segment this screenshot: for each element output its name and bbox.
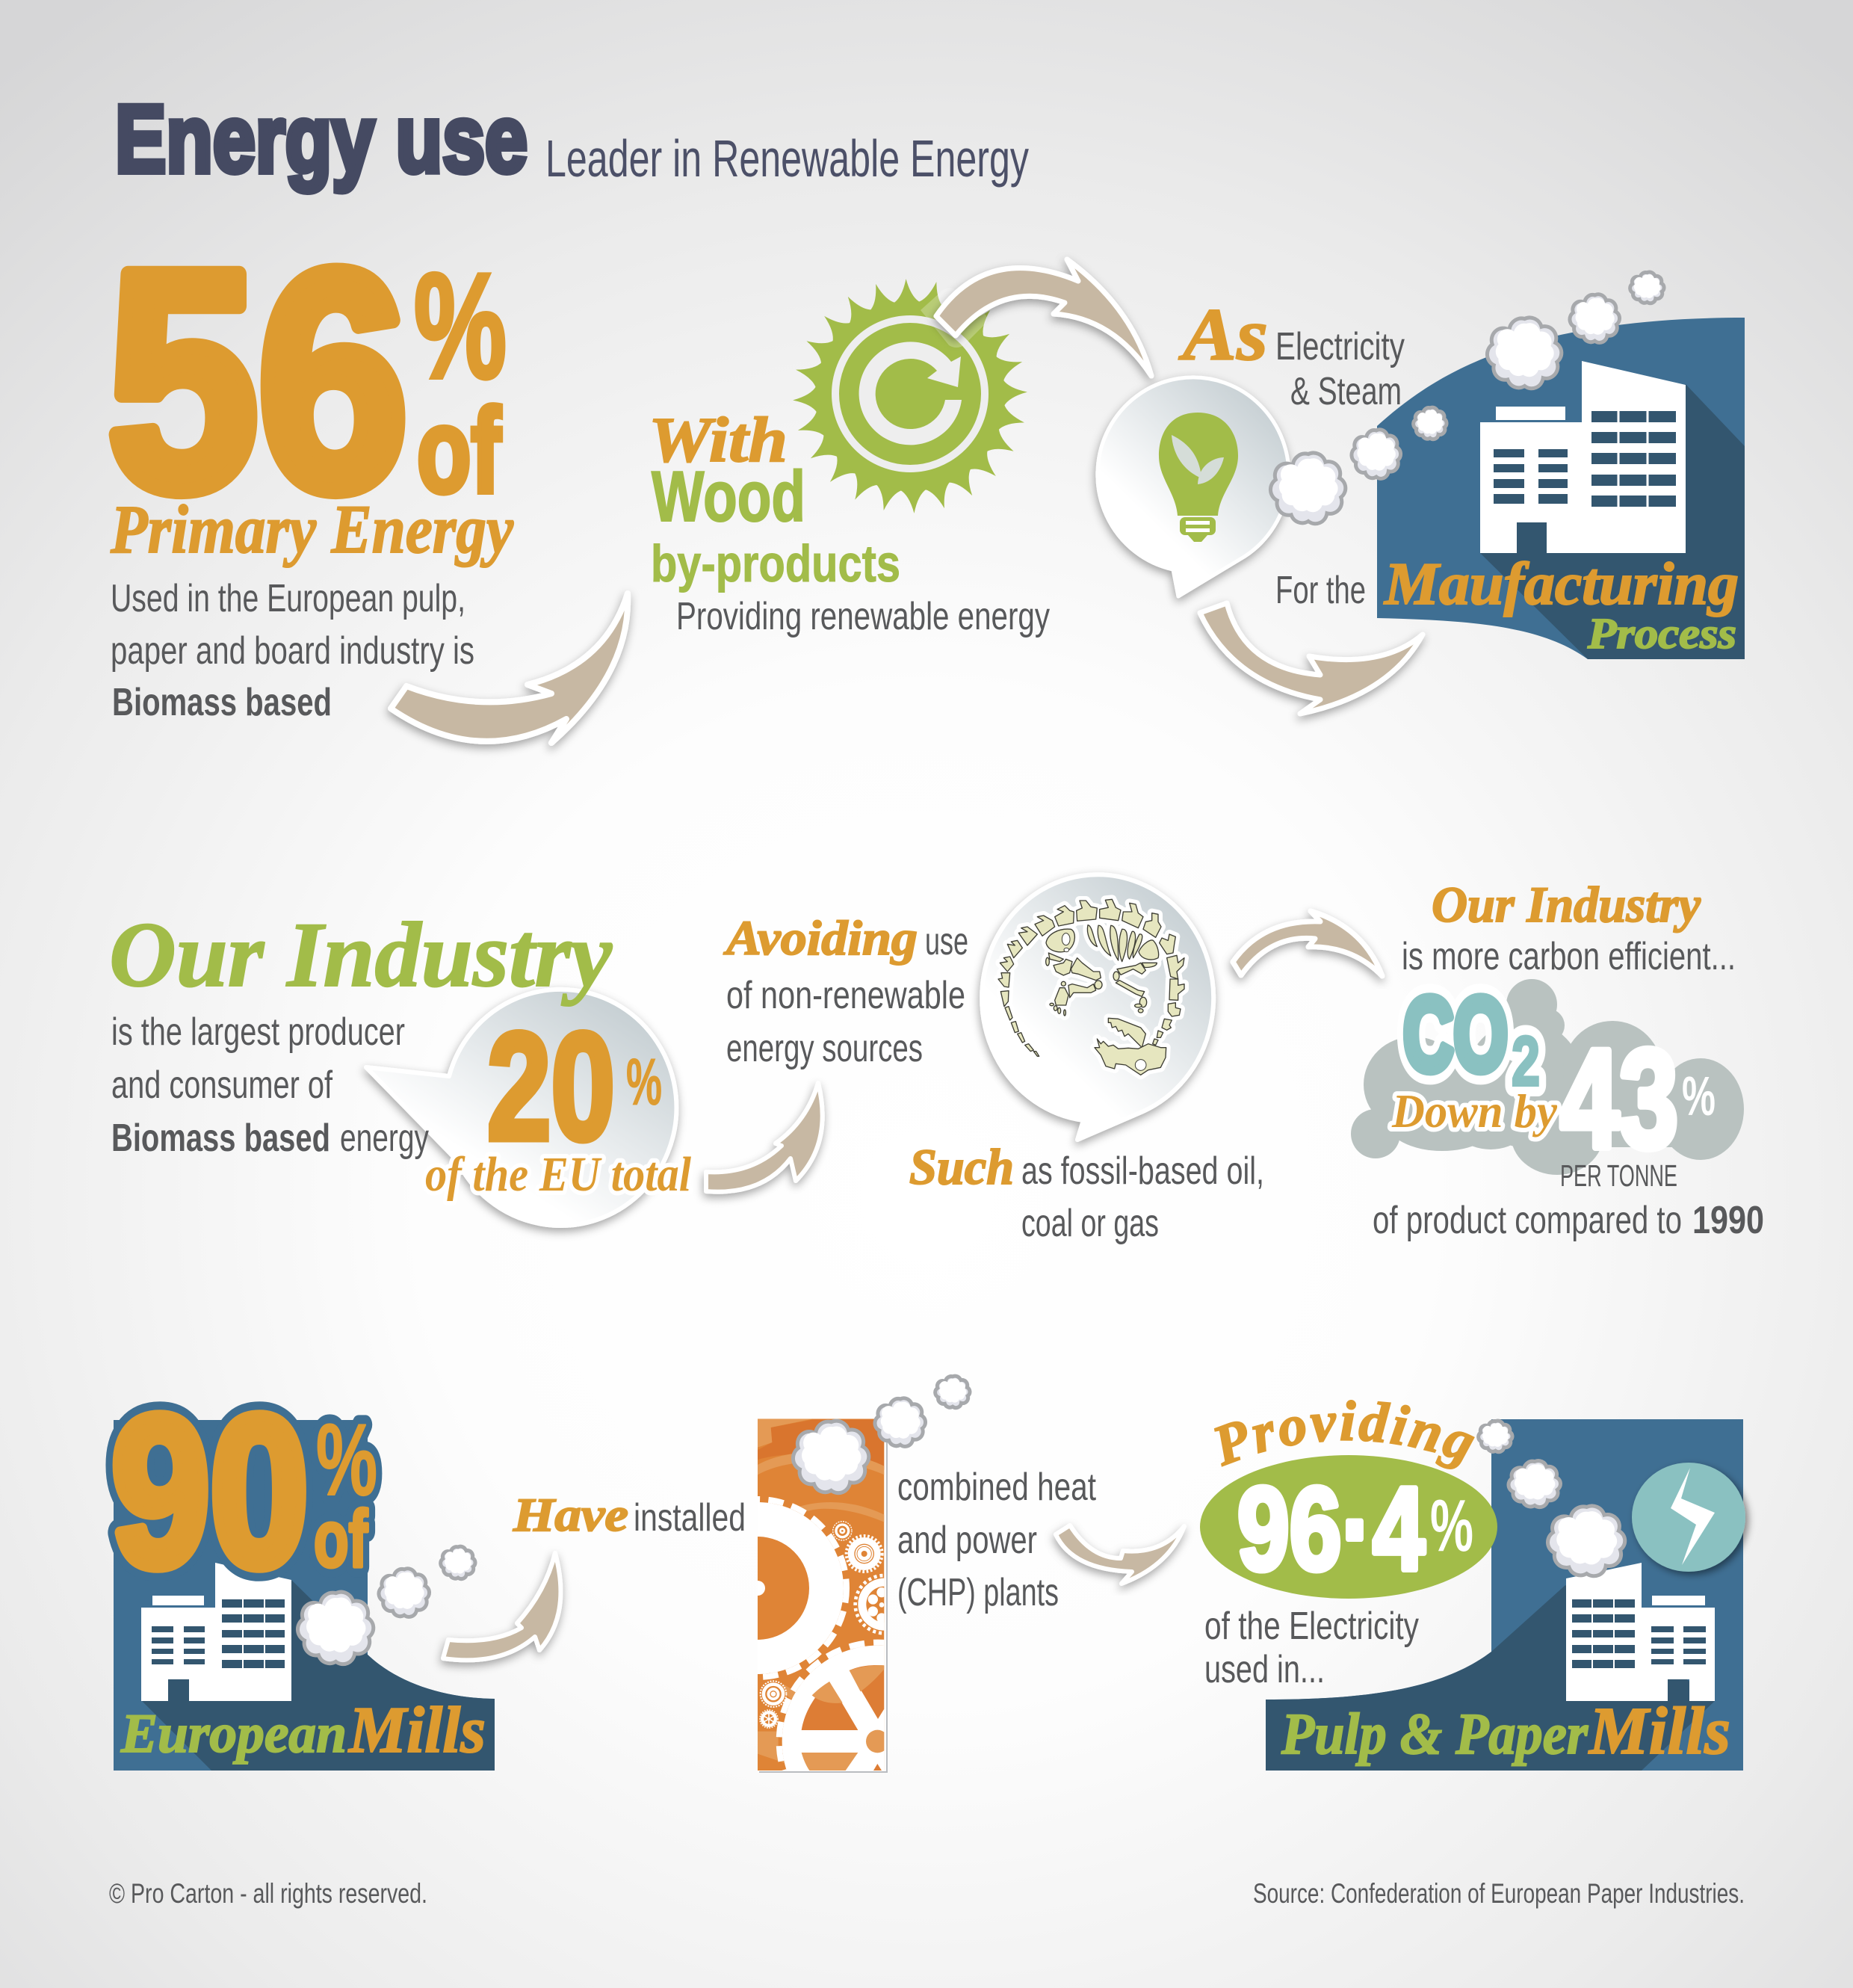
- text: such as fossil-based: [909, 1138, 1264, 1245]
- stat: 56% of primary energy: 56: [108, 207, 408, 555]
- script: pulp and paper mills: Pulp & Paper: [1281, 1701, 1588, 1766]
- script: pulp and paper mills: Mills: [1588, 1694, 1730, 1768]
- script: of the EU total: of the EU total: [425, 1147, 692, 1202]
- text: with wood by-products: by-products: [651, 534, 900, 593]
- text: combined heat and power: [897, 1466, 1096, 1614]
- arrow: biomass to wood: [391, 593, 628, 743]
- panel: European mills: [111, 1371, 495, 1771]
- text: with wood by-products: Wood: [652, 457, 805, 537]
- text: carbon efficient: is more carbon efficient...: [1402, 935, 1736, 978]
- footer: copyright: © Pro Carton - all rights reserved.: [109, 1878, 427, 1909]
- text: carbon efficient: Our Industry: [1432, 876, 1701, 933]
- clouds: CHP smoke: [793, 1376, 970, 1493]
- text: combined heat and power: and power: [897, 1519, 1037, 1562]
- text: largest producer: and consumer of: [111, 1064, 332, 1107]
- text: carbon efficient: [1402, 876, 1736, 978]
- stat: 56% of primary energy: of: [417, 383, 501, 517]
- text: avoiding non-renewable: [723, 911, 968, 1070]
- icon: factory building: [1566, 1563, 1715, 1701]
- arrow: to avoiding: [706, 1083, 823, 1192]
- speech bubble: 20 percent: [366, 990, 676, 1226]
- text: avoiding non-renewable: use: [925, 920, 968, 963]
- text: avoiding non-renewable: energy sources: [726, 1027, 923, 1070]
- text: have installed: Have: [513, 1488, 628, 1541]
- stat: providing 96.4%: 96·4: [1237, 1463, 1425, 1595]
- text: largest producer: energy: [340, 1117, 429, 1160]
- arrow: sun to bulb: [936, 259, 1151, 376]
- arrow: to providing: [1056, 1525, 1184, 1584]
- stat: CO2 down by 43%: CO: [1403, 975, 1508, 1093]
- text: biomass description: [111, 577, 474, 724]
- script: European Mills: Mills: [347, 1694, 486, 1767]
- stat: CO2 down by 43%: [1391, 975, 1716, 1177]
- script: Maufacturing Process: Process: [1587, 609, 1736, 658]
- stat: 56% of primary energy: %: [414, 243, 507, 410]
- stat: providing 96.4%: %: [1430, 1484, 1473, 1566]
- script: pulp and paper mills: [1281, 1694, 1730, 1768]
- text: per tonne: PER TONNE: [1560, 1158, 1677, 1193]
- stat: providing 96.4%: [1200, 1400, 1497, 1599]
- text: per tonne: 1990: [1692, 1199, 1764, 1242]
- stat: CO2 down by 43%: %: [1682, 1065, 1716, 1127]
- panel: manufacturing factory: [1377, 318, 1745, 659]
- text: as electricity and steam: Electricity: [1275, 325, 1405, 368]
- stat: 90% of: %: [316, 1403, 377, 1516]
- clouds: factory smoke: [1270, 272, 1664, 524]
- arrow: to carbon efficient: [1233, 911, 1382, 976]
- icon: dinosaur skeleton: [998, 899, 1184, 1075]
- text: combined heat and power: (CHP) plants: [897, 1571, 1059, 1614]
- text: largest producer: is the largest producer: [111, 1010, 405, 1054]
- panel: CHP gears: [758, 1419, 888, 1773]
- text: largest producer: [111, 1010, 429, 1160]
- text: biomass description: Biomass based: [112, 681, 332, 724]
- stat: CO2 down by 43%: 2: [1512, 1022, 1540, 1100]
- text: as electricity and steam: As: [1178, 293, 1268, 376]
- text: such as fossil-based: Such: [909, 1138, 1014, 1195]
- stat: 90% of: 90: [111, 1371, 309, 1611]
- icon: recycling sun: [792, 278, 1028, 514]
- text: as electricity and steam: For the: [1275, 569, 1366, 612]
- text: combined heat and power: combined heat: [897, 1466, 1096, 1509]
- icon: green bulb with leaves: [1159, 413, 1238, 542]
- title: [115, 86, 1029, 193]
- script: Primary Energy: Primary Energy: [110, 491, 514, 567]
- stat: 90% of: of: [314, 1493, 368, 1584]
- text: biomass description: Used in the European pulp,: [111, 577, 465, 620]
- text: avoiding non-renewable: of non-renewable: [726, 974, 965, 1017]
- speech bubble: fossil: [982, 874, 1213, 1140]
- text: with wood by-products: [649, 404, 1050, 638]
- stat: 90% of: of: [314, 1493, 368, 1584]
- clouds: pulp mill smoke: [1479, 1421, 1625, 1576]
- icon: factory building: [141, 1563, 291, 1701]
- text: as electricity and steam: [1178, 293, 1405, 612]
- text: per tonne: [1373, 1158, 1764, 1242]
- icon: lightning circle: [1632, 1463, 1745, 1572]
- text: with wood by-products: Providing renewable energy: [676, 595, 1050, 638]
- clouds: mill smoke: [297, 1546, 475, 1664]
- text: with wood by-products: With: [649, 404, 788, 475]
- title: Energy use: [115, 86, 528, 193]
- arrow: bulb to manufacturing: [1200, 603, 1423, 714]
- stat: 90% of: 90: [111, 1371, 309, 1611]
- subtitle: Leader in Renewable Energy: [545, 129, 1029, 188]
- script: Maufacturing Process: Maufacturing: [1383, 552, 1739, 617]
- text: of the electricity: used in...: [1204, 1648, 1325, 1691]
- text: have installed: installed: [634, 1496, 746, 1540]
- text: as electricity and steam: & Steam: [1290, 370, 1402, 413]
- stat: CO2 down by 43%: CO: [1403, 975, 1508, 1093]
- text: avoiding non-renewable: Avoiding: [723, 911, 918, 966]
- script: Maufacturing Process: [1383, 552, 1739, 658]
- speech bubble: light bulb: [1098, 377, 1289, 596]
- text: of the electricity: of the Electricity: [1204, 1605, 1419, 1648]
- stat: CO2 down by 43%: 43: [1560, 1020, 1678, 1177]
- icon: factory building: [1480, 361, 1686, 553]
- text: per tonne: of product compared to: [1373, 1199, 1682, 1242]
- script: Our Industry heading: Our Industry: [109, 904, 613, 1006]
- stat: CO2 down by 43%: Down by: [1391, 1084, 1558, 1137]
- text: have installed: [513, 1488, 746, 1541]
- panel: pulp and paper mills: [1266, 1419, 1745, 1771]
- script: European Mills: European: [120, 1703, 347, 1765]
- text: of the electricity: [1204, 1605, 1419, 1691]
- speech bubble: 20 percent: %: [626, 1045, 662, 1119]
- text: such as fossil-based: as fossil-based oil,: [1021, 1149, 1264, 1193]
- script: Providing: Providing: [1213, 1400, 1475, 1469]
- arrow: to have installed: [443, 1553, 560, 1660]
- text: largest producer: Biomass based: [111, 1117, 330, 1160]
- stat: 90% of: %: [316, 1403, 377, 1516]
- cloud: grey co2: [1351, 979, 1744, 1175]
- text: biomass description: paper and board industry is: [111, 629, 474, 673]
- stat: CO2 down by 43%: 2: [1512, 1022, 1540, 1100]
- speech bubble: 20 percent: 20: [487, 1001, 615, 1172]
- script: European Mills: [120, 1694, 486, 1767]
- text: such as fossil-based: coal or gas: [1021, 1202, 1159, 1245]
